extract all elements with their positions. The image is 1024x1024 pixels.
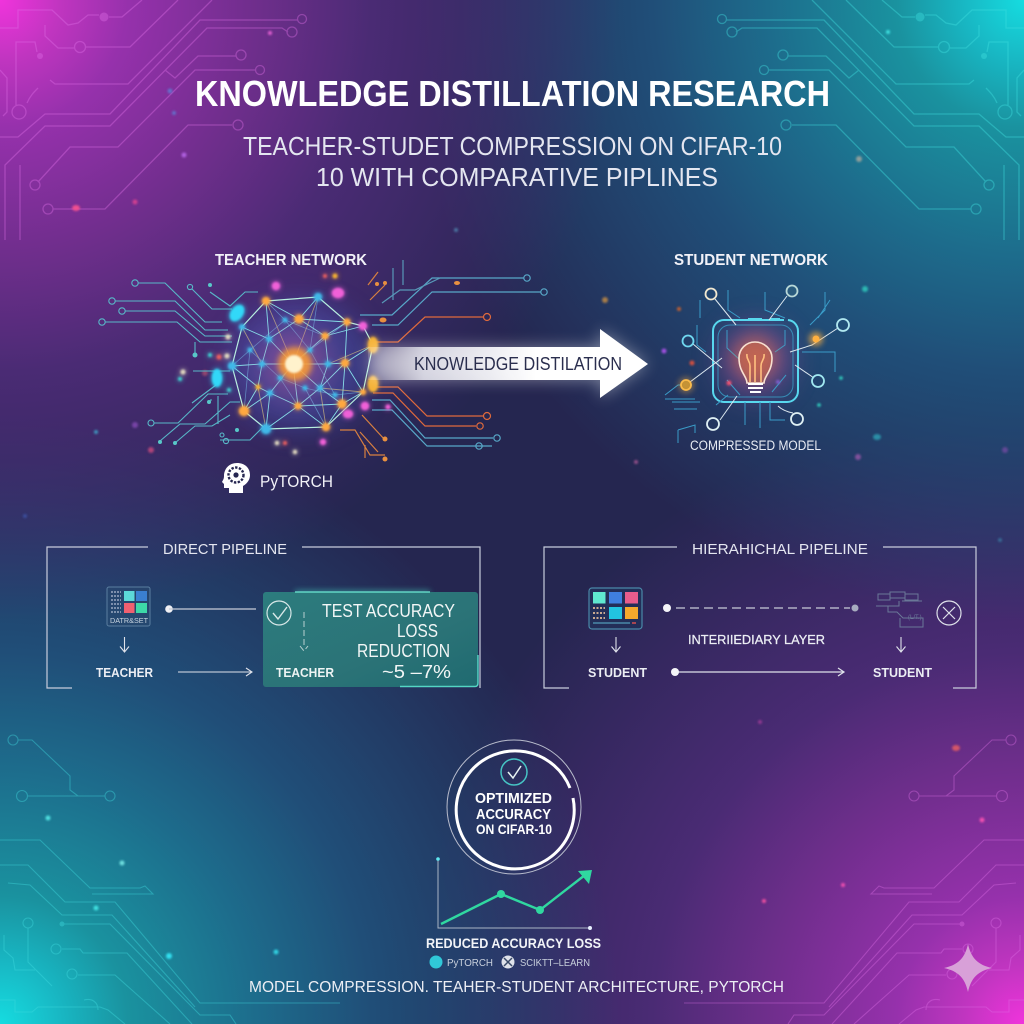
library logos row [430,956,590,969]
panel heading: DIRECT PIPELINE [163,542,287,558]
panel heading: HIERAHICHAL PIPELINE [692,542,868,558]
callout text: LOSS [397,621,438,641]
panel frame [47,547,480,688]
ambient glow [228,301,372,429]
icon: scikit-learn [502,956,514,968]
teacher network label: TEACHER NETWORK [215,252,368,269]
neural mesh [232,297,373,429]
callout text: TEST ACCURACY [322,601,455,621]
solid arrow [671,668,844,676]
faint hierarchy diagram [876,592,923,627]
panel: direct pipeline [47,542,480,688]
student labels: STUDENT [873,665,932,680]
student network label: STUDENT NETWORK [674,252,829,269]
icon: check [501,759,527,785]
intermediary label: INTERIIEDIARY LAYER [688,632,825,647]
right circuit lines [340,260,547,458]
teacher network illustration [99,260,547,462]
subtitle: 10 WITH COMPARATIVE PIPLINES [316,162,718,192]
icon: pytorch [430,956,442,968]
dashed connector [663,604,858,612]
inner circuit traces [665,290,835,443]
mesh node halos [178,274,390,454]
badge: optimized accuracy [447,740,581,874]
callout text: REDUCTION [357,641,450,661]
callout text: ~5 –7% [382,662,451,682]
title: KNOWLEDGE DISTILLATION RESEARCH [195,73,830,114]
student network illustration [662,286,849,443]
subtitle: TEACHER-STUDET COMPRESSION ON CIFAR-10 [243,131,782,161]
teacher label: TEACHER [96,665,154,680]
student labels [588,665,932,680]
PyTorch logo: head icon and label [222,463,333,493]
chart caption: REDUCED ACCURACY LOSS [426,935,601,951]
footer: MODEL COMPRESSION. TEAHER-STUDENT ARCHITECTURE, PYTORCH [249,979,784,996]
icon: dataset [107,587,150,626]
panel frame [544,547,976,688]
subtitle [243,131,782,192]
down arrow [120,637,129,652]
student labels: STUDENT [588,665,647,680]
badge text: ACCURACY [476,806,551,823]
light bulb icon [733,336,777,392]
line chart: reduced accuracy loss [436,857,592,930]
library logos row: SCIKTT–LEARN [520,957,590,969]
icon: check [267,601,291,625]
icon: dataset grid [589,588,642,629]
badge text [475,790,552,837]
callout: test accuracy [263,592,478,687]
PyTorch logo: head icon and label: PyTORCH [260,472,333,491]
dashed arrow [300,612,308,651]
icon: cancel [937,601,961,625]
badge text: OPTIMIZED [475,790,552,807]
chip frame [713,319,798,402]
connector line [165,605,256,613]
badge text: ON CIFAR-10 [476,822,552,837]
decorative circuit traces [0,0,306,240]
central glow [261,330,329,398]
knowledge distillation arrow [368,329,648,398]
library logos row: PyTORCH [447,957,493,969]
callout: test accuracy: TEACHER [276,665,335,680]
icon: sparkle [944,944,992,992]
right arrow [178,668,252,676]
icon: dataset: DATR&SET [110,616,148,625]
network nodes [681,286,849,430]
icon: head with gear [222,463,250,493]
panel: hierarchical pipeline [544,542,976,688]
compressed model caption: COMPRESSED MODEL [690,438,821,453]
faint hierarchy diagram: (L/T.) [908,615,922,621]
left circuit lines [99,280,265,444]
knowledge distillation arrow: KNOWLEDGE DISTILATION [414,354,622,374]
mesh nodes [178,274,390,454]
down arrows [612,637,906,652]
callout text [322,601,455,682]
connector lines [690,296,838,420]
